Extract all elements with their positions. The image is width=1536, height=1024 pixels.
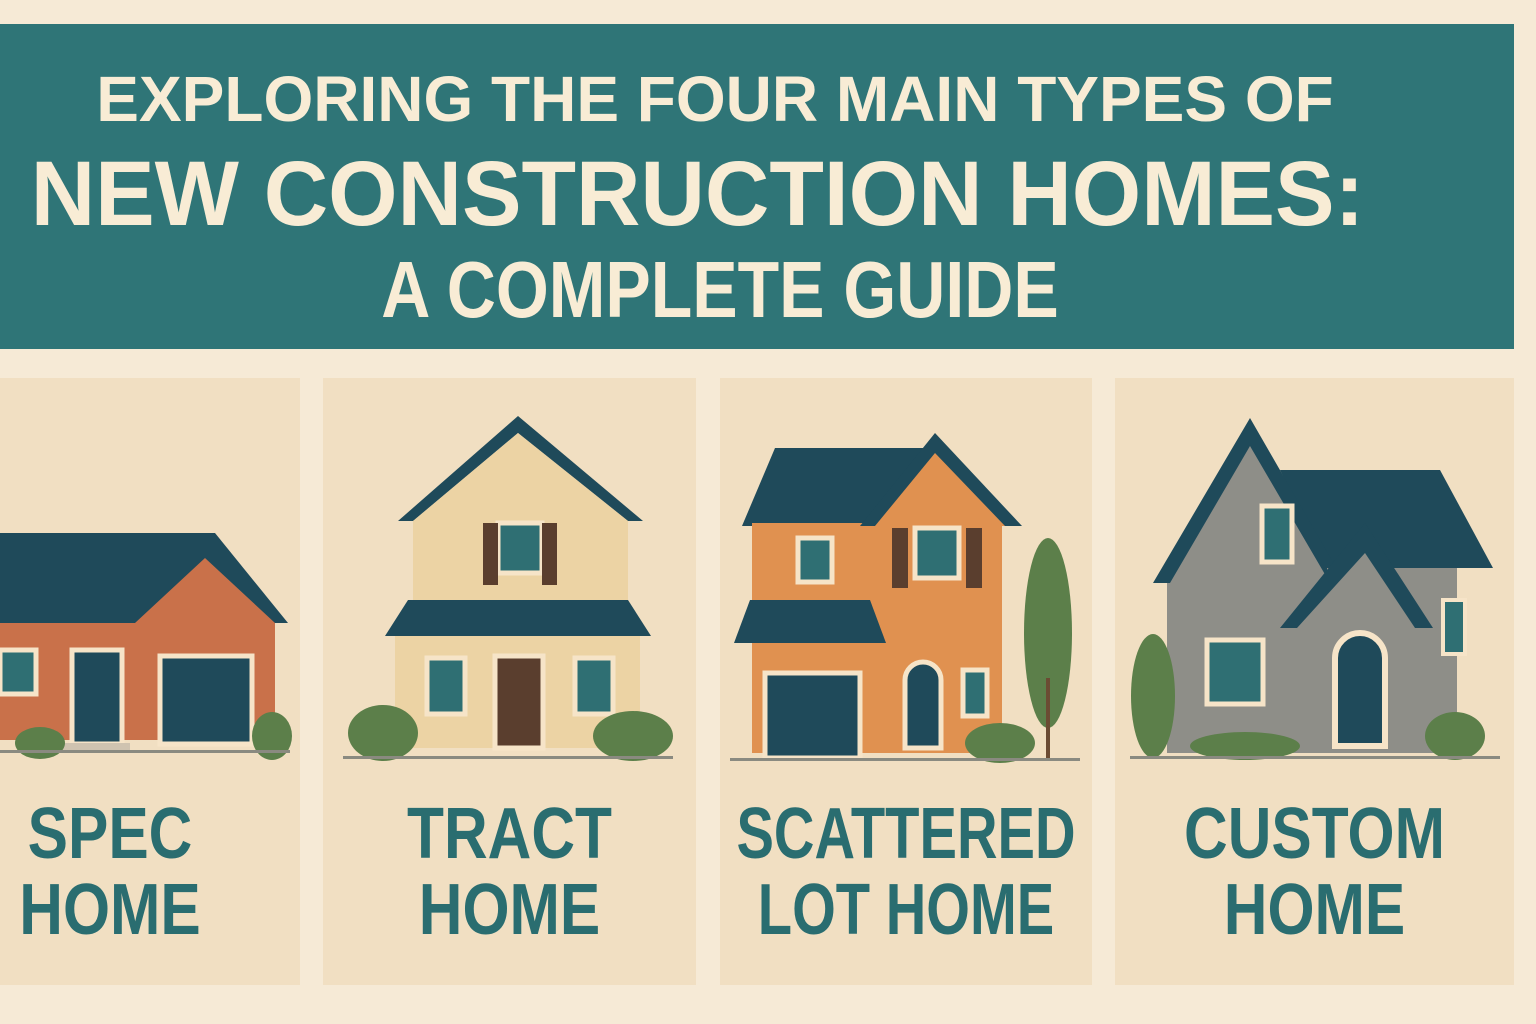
title line 1: EXPLORING THE FOUR MAIN TYPES OF xyxy=(96,63,1334,135)
label: custom home: HOME xyxy=(1224,870,1405,950)
panel: scattered lot home xyxy=(720,378,1092,985)
title line 2: NEW CONSTRUCTION HOMES: xyxy=(31,143,1364,245)
label: custom home: CUSTOM xyxy=(1184,794,1445,874)
label: spec home: HOME xyxy=(19,870,201,950)
panel: tract home xyxy=(323,378,696,985)
label: tract home: HOME xyxy=(419,870,600,950)
icon: tract house xyxy=(343,416,673,761)
label: tract home xyxy=(407,794,612,950)
label: scattered lot home: SCATTERED xyxy=(736,794,1076,874)
label: spec home xyxy=(19,794,201,950)
label: tract home: TRACT xyxy=(407,794,612,874)
label: spec home: SPEC xyxy=(28,794,192,874)
title line 3: A COMPLETE GUIDE xyxy=(381,245,1059,334)
label: scattered lot home xyxy=(736,794,1076,950)
icon: scattered lot house xyxy=(730,433,1080,763)
label: scattered lot home: LOT HOME xyxy=(758,870,1054,950)
label: custom home xyxy=(1184,794,1445,950)
panel: custom home xyxy=(1115,378,1514,985)
title banner xyxy=(0,24,1514,349)
panel: spec home xyxy=(0,378,300,985)
icon: spec house xyxy=(0,533,292,760)
icon: custom house xyxy=(1130,418,1500,760)
